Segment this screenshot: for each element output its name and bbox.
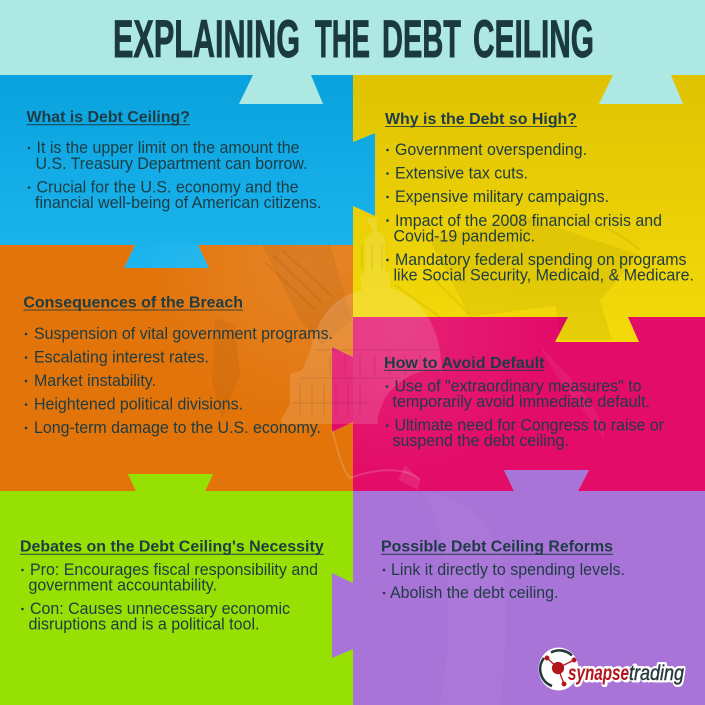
panel text: Possible Debt Ceiling Reforms: Abolish the debt ceiling. bbox=[390, 584, 558, 602]
panel text: Debates on the Debt Ceiling's Necessity: Pro: Encourages fiscal responsibility and bbox=[30, 561, 318, 579]
logo: synapsetrading: synapse bbox=[568, 662, 629, 685]
panel text: What is Debt Ceiling: U.S. Treasury Department can borrow. bbox=[36, 155, 308, 173]
panel text: Possible Debt Ceiling Reforms: Possible Debt Ceiling Reforms bbox=[381, 539, 613, 556]
panel text: Debates on the Debt Ceiling's Necessity bbox=[20, 539, 324, 634]
panel: purple background bbox=[332, 470, 705, 705]
panel: orange background bbox=[0, 245, 353, 491]
panel text: How to Avoid Default: temporarily avoid immediate default. bbox=[392, 393, 650, 411]
panel text: What is Debt Ceiling: It is the upper limit on the amount the bbox=[36, 139, 300, 157]
panel text: Consequences of the Breach: Long-term damage to the U.S. economy. bbox=[34, 419, 321, 437]
panel text: Why is the Debt so High: Extensive tax cuts. bbox=[395, 165, 528, 183]
background photo: Capitol dome, banknotes and hands bbox=[140, 215, 640, 705]
panel: green background bbox=[0, 474, 353, 705]
panel text: How to Avoid Default bbox=[384, 355, 665, 450]
panel text: How to Avoid Default: suspend the debt ceiling. bbox=[392, 432, 569, 450]
panel text: Consequences of the Breach: Heightened political divisions. bbox=[34, 396, 243, 414]
panel text: Why is the Debt so High: Impact of the 2008 financial crisis and bbox=[395, 212, 662, 230]
panel text: Debates on the Debt Ceiling's Necessity: government accountability. bbox=[28, 577, 217, 595]
title: DEBT bbox=[382, 10, 461, 69]
panel text: What is Debt Ceiling: Crucial for the U.S. economy and the bbox=[36, 179, 298, 197]
title bbox=[113, 10, 594, 69]
panel text: Why is the Debt so High: Expensive military campaigns. bbox=[395, 188, 609, 206]
panel text: Consequences of the Breach: Consequences of the Breach bbox=[23, 295, 243, 312]
panel text: Why is the Debt so High: Mandatory federal spending on programs bbox=[395, 251, 686, 269]
panel text: Why is the Debt so High: Government overspending. bbox=[395, 141, 587, 159]
panel: pink background bbox=[332, 317, 705, 491]
panel text: Why is the Debt so High: Why is the Debt so High? bbox=[385, 111, 577, 128]
panel text: Debates on the Debt Ceiling's Necessity: Con: Causes unnecessary economic bbox=[30, 600, 290, 618]
header band bbox=[0, 0, 705, 104]
panel text: Why is the Debt so High bbox=[385, 111, 694, 284]
panel text: What is Debt Ceiling: financial well-being of American citizens. bbox=[35, 194, 322, 212]
panel text: Consequences of the Breach: Suspension of vital government programs. bbox=[34, 325, 333, 343]
title: CEILING bbox=[473, 10, 594, 69]
panel text: Possible Debt Ceiling Reforms: Link it directly to spending levels. bbox=[391, 561, 625, 579]
logo: synapsetrading bbox=[538, 648, 684, 690]
panel text: How to Avoid Default: Ultimate need for Congress to raise or bbox=[394, 417, 665, 435]
panel text: Why is the Debt so High: Covid-19 pandemic. bbox=[394, 228, 535, 246]
panel text: Consequences of the Breach: Market instability. bbox=[34, 372, 156, 390]
panel text: Why is the Debt so High: like Social Security, Medicaid, & Medicare. bbox=[394, 266, 694, 284]
title: THE bbox=[315, 10, 370, 69]
panel text: How to Avoid Default: Use of "extraordinary measures" to bbox=[394, 378, 642, 396]
panel text: Possible Debt Ceiling Reforms bbox=[381, 539, 625, 602]
panel text: What is Debt Ceiling: What is Debt Ceiling? bbox=[26, 109, 190, 126]
panel text: Debates on the Debt Ceiling's Necessity: Debates on the Debt Ceiling's Necessity bbox=[20, 539, 324, 556]
panel text: Debates on the Debt Ceiling's Necessity: disruptions and is a political tool. bbox=[28, 616, 260, 634]
panel: yellow background bbox=[353, 75, 705, 342]
panel: blue background bbox=[0, 75, 375, 268]
panel text: Consequences of the Breach: Escalating interest rates. bbox=[34, 349, 209, 367]
panel text: What is Debt Ceiling bbox=[26, 109, 322, 212]
logo: synapsetrading: trading bbox=[629, 662, 684, 685]
Capitol dome bbox=[281, 218, 442, 424]
title: EXPLAINING bbox=[113, 10, 300, 69]
panel text: Consequences of the Breach bbox=[23, 295, 333, 437]
panel text: How to Avoid Default: How to Avoid Default bbox=[384, 355, 545, 372]
